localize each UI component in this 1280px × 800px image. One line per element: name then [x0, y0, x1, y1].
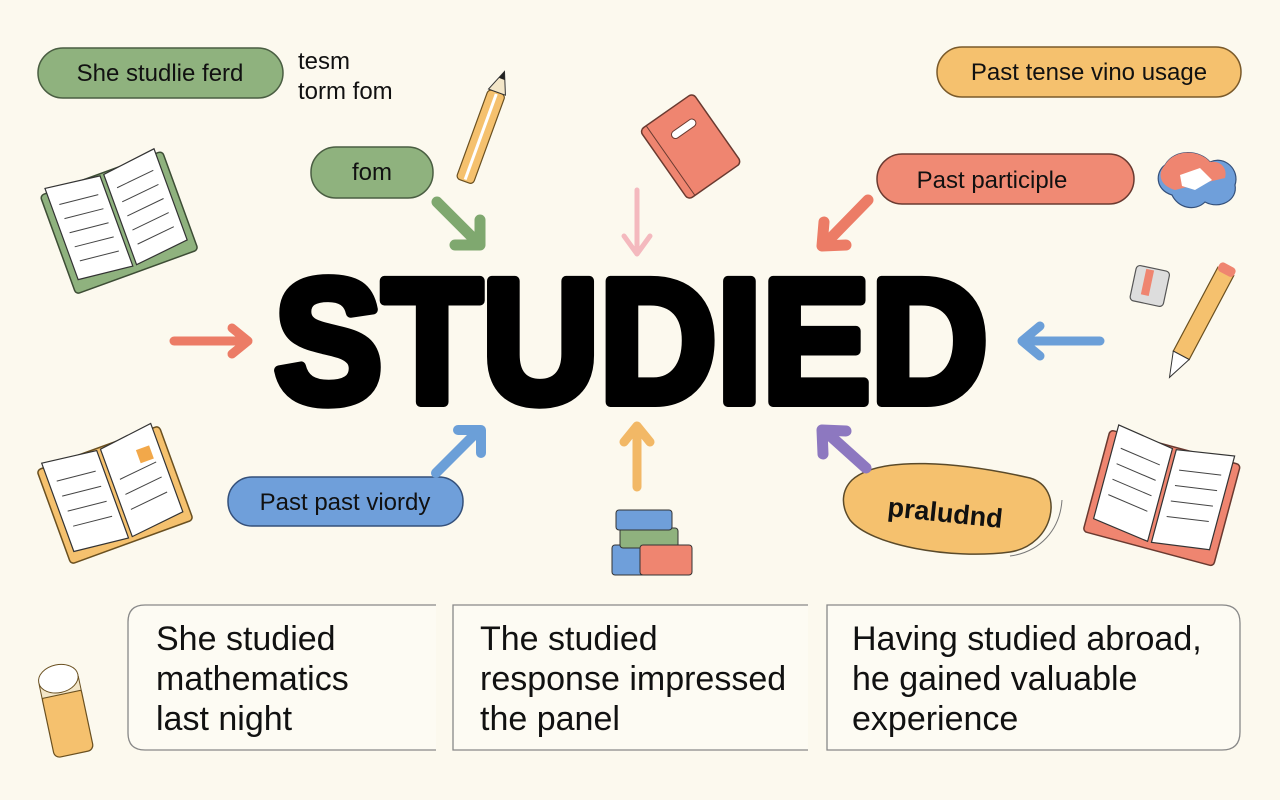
title: STUDIED: STUDIED — [274, 244, 988, 440]
panel: sentence 2: response impressed — [480, 660, 786, 698]
panel: sentence 1 — [128, 605, 436, 750]
pill: She studlie ferd: She studlie ferd — [77, 60, 243, 87]
arrow: purple — [822, 430, 866, 468]
arrow: green — [437, 202, 480, 245]
pill: Past participle: Past participle — [917, 167, 1067, 194]
blob: praludnd — [843, 464, 1062, 556]
pill: fom — [311, 147, 433, 198]
pill: Past tense vino usage — [937, 47, 1241, 97]
blob: praludnd: praludnd — [886, 492, 1004, 534]
icon: heart blob — [1158, 153, 1236, 208]
text: tesm torm fom: tesm — [298, 48, 350, 75]
panel: sentence 3: he gained valuable — [852, 660, 1137, 698]
text: tesm torm fom: torm fom — [298, 78, 393, 105]
icon: book stack — [612, 510, 692, 575]
pill: Past tense vino usage: Past tense vino usage — [971, 59, 1207, 86]
icon: pencil top-left — [456, 68, 513, 184]
panel: sentence 2: the panel — [480, 700, 620, 738]
icon: orange open book — [35, 421, 193, 564]
panel: sentence 3 — [827, 605, 1240, 750]
arrow: blue up-right — [436, 430, 481, 473]
arrow: red right — [174, 328, 248, 354]
panel: sentence 2: The studied — [480, 620, 658, 658]
arrow: red down-left — [822, 200, 868, 246]
pill: Past past viordy: Past past viordy — [260, 489, 430, 516]
panel: sentence 1: She studied — [156, 620, 336, 658]
icon: sharpener — [1129, 265, 1170, 307]
icon: pencil right — [1162, 261, 1237, 382]
panel: sentence 3: Having studied abroad, — [852, 620, 1202, 658]
panel: sentence 1: mathematics — [156, 660, 349, 698]
pill: Past past viordy — [228, 477, 463, 526]
icon: glue stick — [36, 661, 94, 758]
pill: She studlie ferd — [38, 48, 283, 98]
text: tesm torm fom — [298, 48, 393, 105]
pill: Past participle — [877, 154, 1134, 204]
icon: red book — [640, 93, 742, 200]
icon: red open book right — [1083, 423, 1242, 566]
panel: sentence 1: last night — [156, 700, 293, 738]
arrow: blue left — [1022, 326, 1100, 356]
arrow: orange up — [624, 426, 650, 487]
panel: sentence 3: experience — [852, 700, 1018, 738]
icon: green open book — [38, 146, 198, 294]
pill: fom: fom — [352, 159, 392, 186]
panel: sentence 2 — [453, 605, 808, 750]
arrow: pink — [624, 190, 650, 254]
